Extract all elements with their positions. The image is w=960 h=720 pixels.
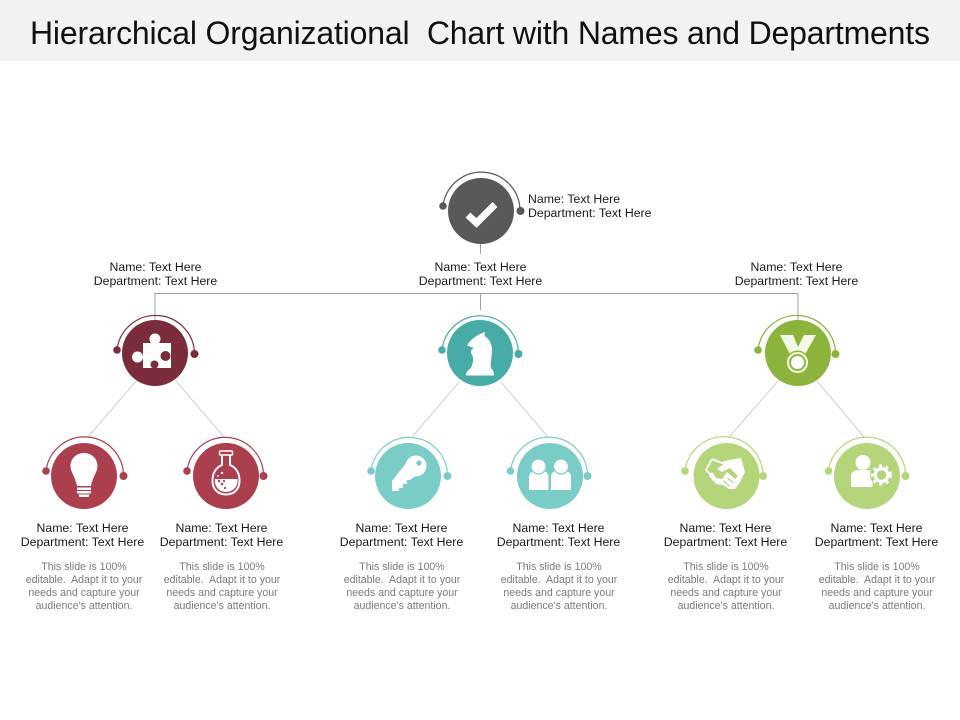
leaf text: person with gear: This slide is 100%	[834, 561, 920, 573]
leaf text: key: This slide is 100%	[359, 561, 445, 573]
label: left branch: Name: Text Here	[109, 260, 202, 274]
root label: Name: Text Here	[528, 192, 620, 206]
leaf node: light bulb	[42, 437, 128, 509]
leaf text: person with gear: Name: Text Here	[830, 521, 923, 535]
leaf text: person with gear: audience's attention.	[829, 600, 925, 612]
leaf node: key	[367, 437, 452, 509]
icon: key	[392, 456, 426, 491]
icon: check mark	[468, 204, 495, 223]
leaf text: key: Name: Text Here	[355, 521, 448, 535]
leaf text: people	[497, 521, 620, 612]
leaf text: bulb: This slide is 100%	[41, 561, 127, 573]
leaf node: person with gear	[825, 437, 910, 509]
icon: flask	[212, 451, 240, 494]
leaf text: bulb	[21, 521, 144, 612]
right branch node: medal	[754, 315, 840, 386]
label: right branch	[735, 260, 858, 288]
leaf text: people: editable. Adapt it to your	[501, 574, 618, 586]
leaf text: people: audience's attention.	[511, 600, 607, 612]
leaf text: handshake: Department: Text Here	[664, 535, 787, 549]
leaf node: handshake	[681, 437, 767, 509]
leaf text: person with gear: needs and capture your	[821, 587, 933, 599]
leaf text: person with gear: Department: Text Here	[815, 535, 938, 549]
icon: two people	[529, 459, 571, 490]
label: left branch: Department: Text Here	[94, 274, 217, 288]
connector lines	[88, 244, 864, 437]
leaf text: person with gear	[815, 521, 938, 612]
leaf text: key: editable. Adapt it to your	[344, 574, 461, 586]
icon: chess knight	[466, 332, 494, 376]
icon: puzzle piece	[132, 334, 171, 368]
label: right branch: Department: Text Here	[735, 274, 858, 288]
label: centre branch	[419, 260, 542, 288]
leaf text: key: audience's attention.	[354, 600, 450, 612]
leaf text: bulb: editable. Adapt it to your	[26, 574, 143, 586]
leaf text: people: Department: Text Here	[497, 535, 620, 549]
leaf text: handshake: needs and capture your	[670, 587, 782, 599]
leaf text: flask: editable. Adapt it to your	[164, 574, 281, 586]
root node: check mark	[439, 172, 524, 244]
leaf text: handshake: editable. Adapt it to your	[668, 574, 785, 586]
label: left branch	[94, 260, 217, 288]
left branch node: puzzle	[113, 315, 198, 386]
leaf text: flask: Department: Text Here	[160, 535, 283, 549]
leaf text: handshake: Name: Text Here	[679, 521, 772, 535]
root label: Department: Text Here	[528, 206, 652, 220]
icon: medal	[780, 335, 816, 374]
leaf text: handshake	[664, 521, 787, 612]
leaf text: handshake: audience's attention.	[678, 600, 774, 612]
leaf node: two people	[507, 437, 592, 509]
leaf text: key: needs and capture your	[346, 587, 458, 599]
leaf text: flask: Name: Text Here	[175, 521, 268, 535]
label: centre branch: Name: Text Here	[434, 260, 527, 274]
leaf text: key	[340, 521, 463, 612]
label: right branch: Name: Text Here	[750, 260, 843, 274]
title banner: Hierarchical Organizational Chart with Names and Departments	[30, 15, 930, 51]
leaf text: flask	[160, 521, 283, 612]
leaf text: bulb: audience's attention.	[36, 600, 132, 612]
leaf text: handshake: This slide is 100%	[683, 561, 769, 573]
centre branch node: chess knight	[438, 316, 522, 386]
icon: light bulb	[70, 453, 98, 497]
leaf text: people: This slide is 100%	[516, 561, 602, 573]
leaf text: key: Department: Text Here	[340, 535, 463, 549]
leaf text: flask: This slide is 100%	[179, 561, 265, 573]
leaf text: flask: audience's attention.	[174, 600, 270, 612]
leaf text: person with gear: editable. Adapt it to your	[819, 574, 936, 586]
title banner	[0, 0, 960, 61]
label: centre branch: Department: Text Here	[419, 274, 542, 288]
icon: handshake	[706, 458, 745, 489]
leaf node: flask	[183, 437, 268, 509]
leaf text: flask: needs and capture your	[166, 587, 278, 599]
leaf text: bulb: needs and capture your	[28, 587, 140, 599]
leaf text: bulb: Name: Text Here	[36, 521, 129, 535]
leaf text: bulb: Department: Text Here	[21, 535, 144, 549]
leaf text: people: needs and capture your	[503, 587, 615, 599]
leaf text: people: Name: Text Here	[512, 521, 605, 535]
root label	[528, 192, 652, 220]
icon: person with gear	[851, 455, 893, 487]
